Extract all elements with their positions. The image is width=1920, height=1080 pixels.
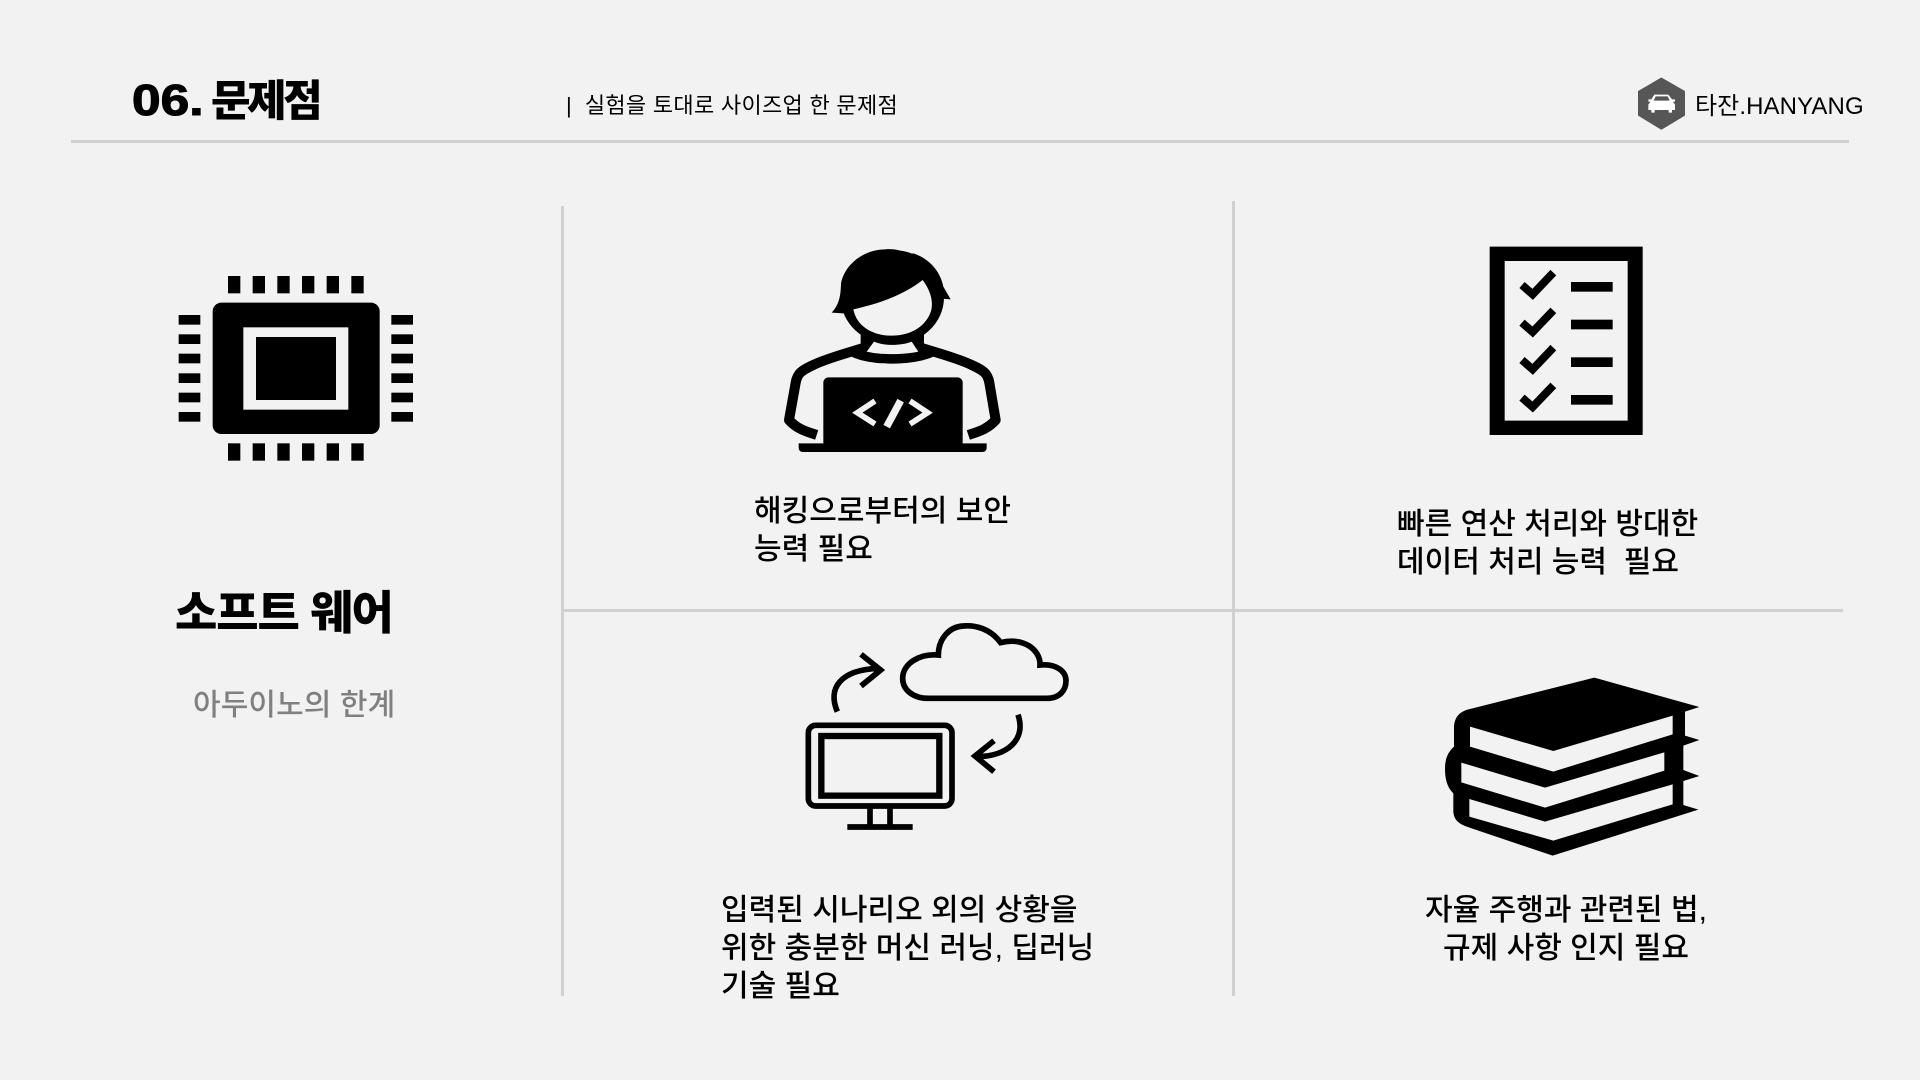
grid divider: left vertical	[560, 206, 564, 996]
icon: microchip	[178, 276, 413, 461]
header rule	[71, 140, 1849, 143]
title: 문제점	[211, 78, 319, 126]
brand name: 타잔.HANYANG	[1695, 93, 1864, 120]
panel: machine learning	[721, 623, 1094, 1003]
grid divider: horizontal	[561, 609, 1843, 612]
text: regulations: 자율 주행과 관련된 법, 규제 사항 인지 필요	[1425, 894, 1707, 965]
panel subheading: 아두이노의 한계	[193, 689, 395, 722]
title	[132, 76, 319, 126]
panel: software	[175, 276, 413, 722]
panel: computing speed	[1397, 246, 1698, 579]
logo: hexagon car icon	[1638, 78, 1685, 130]
header	[71, 76, 1864, 143]
text: machine learning: 입력된 시나리오 외의 상황을 위한 충분한 머신 러닝, 딥러닝 기술 필요	[721, 894, 1094, 1003]
icon: monitor and cloud sync	[806, 623, 1069, 830]
title: 06.	[132, 76, 204, 125]
text: computing speed: 빠른 연산 처리와 방대한 데이터 처리 능력 필요	[1397, 508, 1698, 579]
panel: hacking security	[754, 249, 1011, 566]
icon: programmer with laptop	[784, 249, 1001, 452]
icon: stacked books	[1445, 678, 1700, 856]
text: hacking security: 해킹으로부터의 보안 능력 필요	[754, 495, 1011, 566]
subtitle: | 실험을 토대로 사이즈업 한 문제점	[566, 93, 898, 118]
panel heading: 소프트 웨어	[175, 587, 393, 639]
icon: checklist	[1490, 246, 1643, 435]
panel: regulations	[1425, 678, 1707, 965]
grid divider: right vertical	[1232, 201, 1235, 996]
